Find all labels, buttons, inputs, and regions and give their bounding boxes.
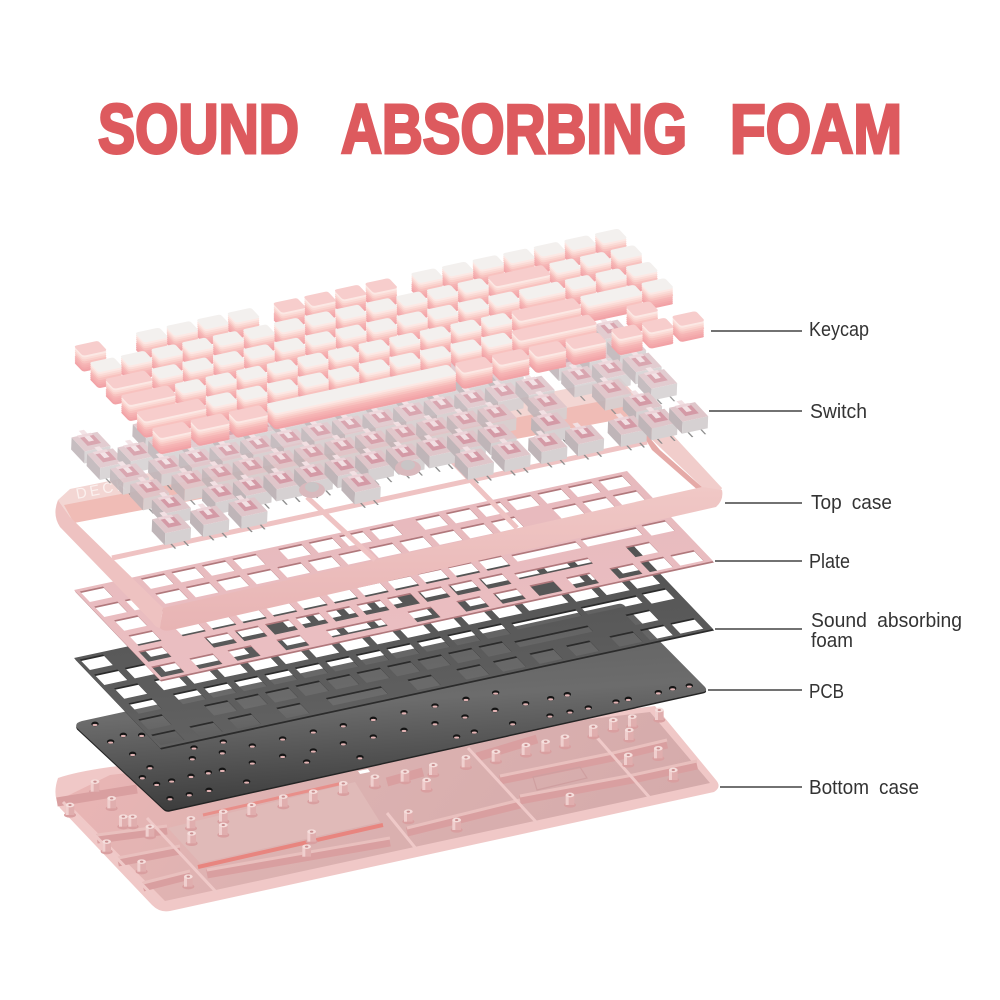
PCB holes right: [400, 683, 693, 739]
label: Sound absorbing foam: foam: [811, 630, 853, 652]
cross bars: [112, 442, 647, 560]
left rail: [55, 500, 163, 628]
raised centre plate: [168, 782, 380, 863]
right rail: [620, 378, 722, 500]
thin partition walls: [63, 733, 650, 903]
label: Sound absorbing foam: [715, 610, 962, 652]
logo on top case: DECK: [75, 476, 130, 503]
layer: keycaps: [61, 229, 718, 454]
label: Plate: Plate: [809, 551, 850, 573]
layer: PCB: [76, 604, 706, 812]
layer: switches: [58, 316, 722, 551]
pink key tops: [74, 229, 705, 438]
rear switch rows: [58, 316, 691, 518]
label: PCB: PCB: [809, 681, 844, 703]
stabilizers: [299, 460, 421, 498]
layer: bottom case: [55, 706, 719, 911]
back rail: [58, 378, 636, 520]
wide ribs: [57, 739, 697, 887]
label: Keycap: Keycap: [809, 319, 869, 341]
front rail: [160, 487, 722, 631]
layer: plate: [74, 471, 714, 682]
label: PCB: [708, 681, 844, 703]
title: [98, 90, 902, 168]
title: FOAM: [730, 90, 902, 168]
front switch rows: [123, 382, 722, 550]
title: SOUND: [98, 90, 299, 168]
layer: top case: [55, 378, 722, 631]
label: Bottom case: Bottom case: [809, 777, 919, 799]
layer: sound absorbing foam: [74, 539, 714, 750]
title: ABSORBING: [341, 90, 687, 168]
label: Plate: [715, 551, 850, 573]
label: Sound absorbing foam: Sound absorbing: [811, 610, 962, 632]
mounting pins right: [399, 708, 679, 833]
label: Switch: Switch: [810, 401, 867, 423]
mounting pins left: [64, 774, 381, 889]
label: Top case: Top case: [811, 492, 892, 514]
PCB holes left: [91, 717, 377, 801]
cream key tops: [74, 229, 705, 438]
